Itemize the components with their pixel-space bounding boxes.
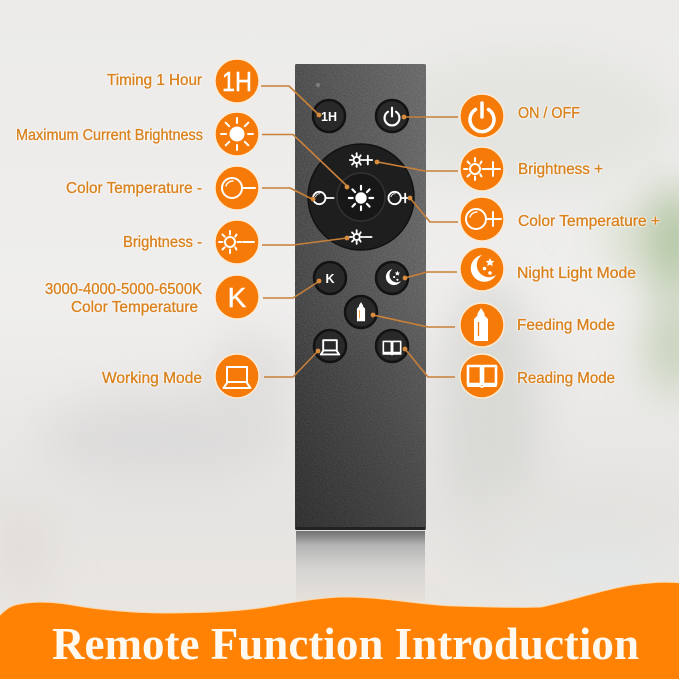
callout: Color Temperature K range	[45, 275, 321, 319]
callout: Brightness +: Brightness +	[518, 161, 603, 178]
callout: Feeding Mode	[371, 303, 615, 347]
button: 1H	[313, 100, 345, 132]
callout: Feeding Mode: Feeding Mode	[517, 317, 615, 334]
button: working	[314, 330, 346, 362]
callout: Working Mode	[102, 349, 320, 398]
callout: Color Temperature +	[408, 196, 660, 241]
callout: Maximum Current Brightness: Maximum Current Brightness	[16, 127, 203, 144]
callout: Working Mode: Working Mode	[102, 370, 202, 387]
button: feeding	[345, 296, 377, 328]
button: K	[314, 262, 346, 294]
callout: Timing 1 Hour: Timing 1 Hour	[107, 72, 202, 89]
callout: Brightness +	[375, 147, 603, 191]
callout: Color Temperature K range: K	[228, 282, 247, 313]
orange wave banner	[0, 582, 679, 679]
indicator LED	[316, 83, 320, 87]
remote control	[295, 64, 426, 530]
remote body	[295, 64, 426, 530]
button: night light	[376, 262, 408, 294]
callout: Timing 1 Hour: 1H	[222, 66, 252, 97]
control dial	[308, 144, 414, 250]
callout: ON / OFF: ON / OFF	[518, 105, 580, 122]
callout: Color Temperature +: Color Temperature +	[518, 213, 660, 230]
callout: Maximum Current Brightness	[16, 112, 349, 189]
button: 1H: 1H	[321, 110, 337, 124]
remote reflection	[296, 531, 425, 601]
callout: Color Temperature K range: 3000-4000-5000-6500K	[45, 281, 203, 298]
callout: Night Light Mode: Night Light Mode	[517, 265, 636, 282]
callout: Brightness -: Brightness -	[123, 234, 202, 251]
callout: Timing 1 Hour	[107, 59, 321, 117]
callout: Night Light Mode	[403, 247, 636, 291]
callout: Reading Mode: Reading Mode	[517, 370, 615, 387]
callout: Color Temperature -	[66, 166, 315, 210]
callout: Brightness -	[123, 220, 349, 264]
button: K: K	[325, 272, 335, 286]
callout: Reading Mode	[403, 347, 615, 398]
button: reading	[376, 330, 408, 362]
title: Remote Function Introduction	[52, 618, 639, 669]
button: power	[376, 100, 408, 132]
callout: ON / OFF	[402, 94, 580, 138]
callout: Color Temperature K range: Color Temperature	[71, 299, 198, 316]
callout: Color Temperature -: Color Temperature -	[66, 180, 202, 197]
